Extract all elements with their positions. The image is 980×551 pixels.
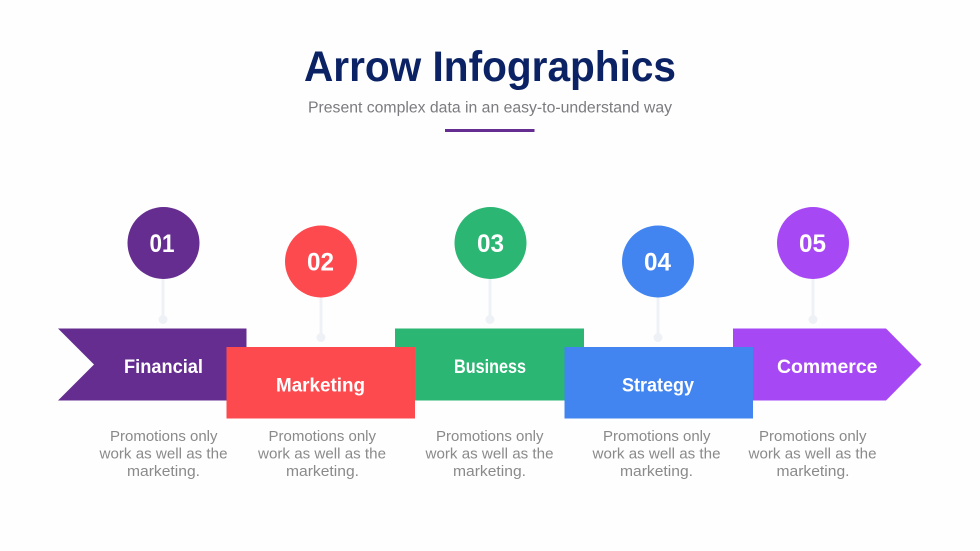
text block: Commerce: marketing. (776, 464, 850, 480)
circle: 02 (285, 226, 357, 298)
circle: 01 (128, 207, 200, 279)
arrow segment: Strategy (564, 347, 753, 418)
circle: 04 (622, 226, 694, 298)
arrow segment: Marketing: Marketing (276, 376, 365, 396)
text block: Financial: marketing. (127, 464, 200, 480)
pin: 05 (808, 278, 818, 324)
circle: 05: 05 (799, 230, 826, 258)
text block: Financial: Promotions only (110, 429, 218, 445)
circle: 03: 03 (477, 230, 504, 258)
text block: Business: marketing. (453, 464, 526, 480)
arrow tail: Financial: Financial (124, 357, 203, 378)
text block: Commerce (747, 429, 876, 480)
text block: Marketing: work as well as the (257, 446, 386, 462)
pin: 04 (654, 297, 662, 342)
text block: Strategy: Promotions only (603, 429, 711, 445)
circle: 02: 02 (307, 248, 334, 276)
title: Arrow Infographics (304, 43, 676, 91)
arrow head: Commerce: Commerce (777, 357, 878, 378)
arrow tail: Financial (58, 328, 246, 400)
subtitle: Present complex data in an easy-to-understand way (308, 100, 672, 116)
title underline (445, 129, 534, 132)
text block: Commerce: Promotions only (759, 429, 867, 445)
text block: Business (424, 429, 554, 480)
arrow head: Commerce (733, 328, 922, 400)
text block: Business: Promotions only (436, 429, 544, 445)
text block: Financial (98, 429, 227, 480)
arrow segment: Business: Business (454, 357, 526, 378)
pin: 01 (158, 278, 168, 324)
circle: 04: 04 (644, 248, 671, 276)
text block: Strategy (591, 429, 720, 480)
text block: Marketing: marketing. (286, 464, 359, 480)
pin: 03 (486, 278, 494, 324)
arrow segment: Business (395, 328, 584, 400)
circle: 03 (454, 207, 526, 279)
arrow segment: Marketing (226, 347, 415, 418)
text block: Financial: work as well as the (98, 446, 227, 462)
circle: 05 (777, 207, 849, 279)
circle: 01: 01 (150, 230, 175, 258)
text block: Strategy: marketing. (620, 464, 693, 480)
text block: Marketing: Promotions only (268, 429, 377, 445)
arrow segment: Strategy: Strategy (622, 376, 694, 396)
pin: 02 (316, 297, 326, 342)
text block: Commerce: work as well as the (747, 446, 876, 462)
text block: Business: work as well as the (424, 446, 554, 462)
text block: Strategy: work as well as the (591, 446, 720, 462)
text block: Marketing (257, 429, 386, 480)
